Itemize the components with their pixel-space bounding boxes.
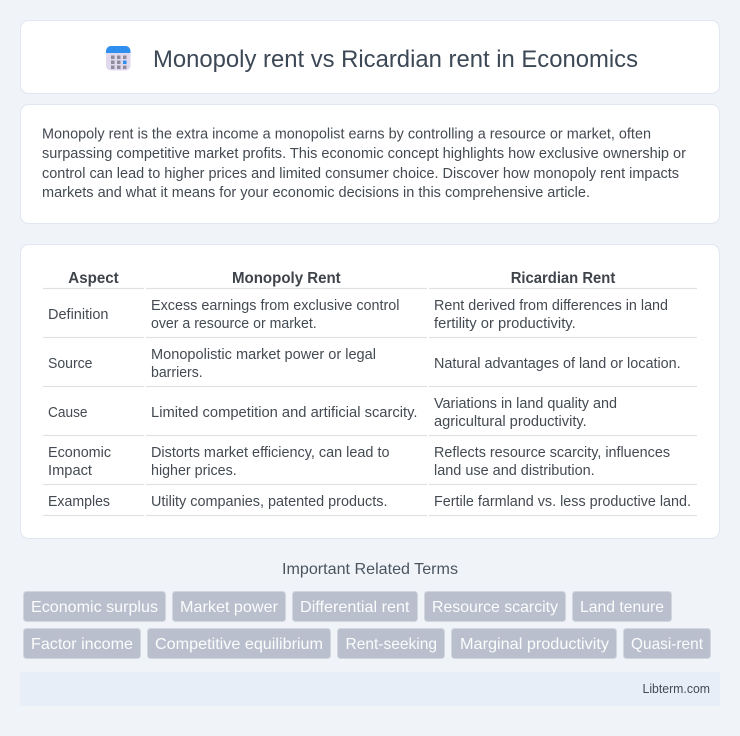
tag: marginal productivity bbox=[452, 628, 616, 658]
title: Monopoly rent vs Ricardian rent in Economics bbox=[153, 46, 638, 73]
row: definition: Rent derived from differences in land bbox=[434, 298, 668, 314]
tag: land tenure bbox=[572, 592, 672, 622]
tag: competitive equilibrium: Competitive equilibrium bbox=[155, 636, 323, 653]
table header bbox=[68, 270, 616, 287]
tag: market power: Market power bbox=[180, 599, 279, 616]
row: cause: Cause bbox=[48, 405, 88, 421]
row: examples bbox=[48, 494, 691, 510]
intro text: markets and what it means for your economic decisions in this comprehensive article. bbox=[42, 184, 590, 201]
tag: factor income: Factor income bbox=[31, 636, 133, 653]
row: examples: Examples bbox=[48, 494, 110, 510]
row: cause: Variations in land quality and bbox=[434, 396, 617, 412]
row: source: Source bbox=[48, 356, 92, 372]
intro text bbox=[42, 126, 686, 201]
row: examples: Utility companies, patented products. bbox=[151, 494, 388, 510]
row: source: Natural advantages of land or location. bbox=[434, 356, 681, 372]
tag: land tenure: Land tenure bbox=[580, 599, 664, 616]
tag: quasi-rent: Quasi-rent bbox=[631, 636, 704, 653]
comparison table card bbox=[20, 244, 720, 538]
row: source: Monopolistic market power or legal bbox=[151, 347, 376, 363]
intro text: control can lead to higher prices and limited consumer choice. Discover how monopoly rent impacts bbox=[42, 165, 679, 182]
row: cause: Limited competition and artificial scarcity. bbox=[151, 405, 418, 421]
row: definition: Definition bbox=[48, 307, 108, 323]
row: definition: fertility or productivity. bbox=[434, 316, 576, 332]
footer brand: Libterm.com bbox=[642, 682, 710, 696]
tag: differential rent: Differential rent bbox=[300, 599, 410, 616]
row: definition: over a resource or market. bbox=[151, 316, 317, 332]
tag: marginal productivity: Marginal productivity bbox=[460, 636, 609, 653]
tag: market power bbox=[172, 592, 286, 622]
footer bbox=[20, 672, 720, 706]
tag: resource scarcity bbox=[424, 592, 566, 622]
row: definition bbox=[48, 298, 668, 332]
tag: rent-seeking bbox=[338, 628, 444, 658]
row: cause bbox=[48, 396, 617, 430]
header card bbox=[20, 20, 720, 94]
tag: economic surplus: Economic surplus bbox=[31, 599, 158, 616]
tag: factor income bbox=[24, 628, 140, 658]
row: economic impact: Reflects resource scarcity, influences bbox=[434, 445, 670, 461]
row: cause: agricultural productivity. bbox=[434, 414, 587, 430]
table header: Ricardian Rent bbox=[511, 270, 616, 287]
intro text: surpassing competitive market profits. This economic concept highlights how exclusive ownership or bbox=[42, 145, 686, 162]
tag: economic surplus bbox=[24, 592, 166, 622]
row: economic impact: Economic bbox=[48, 445, 111, 461]
row: economic impact: Impact bbox=[48, 463, 92, 479]
row: economic impact bbox=[48, 445, 670, 479]
related terms tags bbox=[24, 592, 710, 658]
intro text: Monopoly rent is the extra income a monopolist earns by controlling a resource or market, often bbox=[42, 126, 651, 142]
row: economic impact: higher prices. bbox=[151, 463, 237, 479]
tag: differential rent bbox=[292, 592, 418, 622]
row: examples: Fertile farmland vs. less productive land. bbox=[434, 494, 691, 510]
row: economic impact: land use and distribution. bbox=[434, 463, 595, 479]
tag: quasi-rent bbox=[624, 628, 710, 658]
table header: Aspect bbox=[68, 270, 119, 287]
row: source: barriers. bbox=[151, 365, 203, 381]
tag: resource scarcity: Resource scarcity bbox=[432, 599, 558, 616]
icon: calendar bbox=[106, 46, 130, 70]
intro card bbox=[20, 104, 720, 224]
tag: rent-seeking: Rent-seeking bbox=[346, 636, 437, 653]
row: source bbox=[48, 347, 681, 381]
table header: Monopoly Rent bbox=[232, 270, 341, 287]
tag: competitive equilibrium bbox=[148, 628, 330, 658]
row: definition: Excess earnings from exclusive control bbox=[151, 298, 400, 314]
row: economic impact: Distorts market efficiency, can lead to bbox=[151, 445, 390, 461]
related terms heading: Important Related Terms bbox=[282, 561, 458, 578]
